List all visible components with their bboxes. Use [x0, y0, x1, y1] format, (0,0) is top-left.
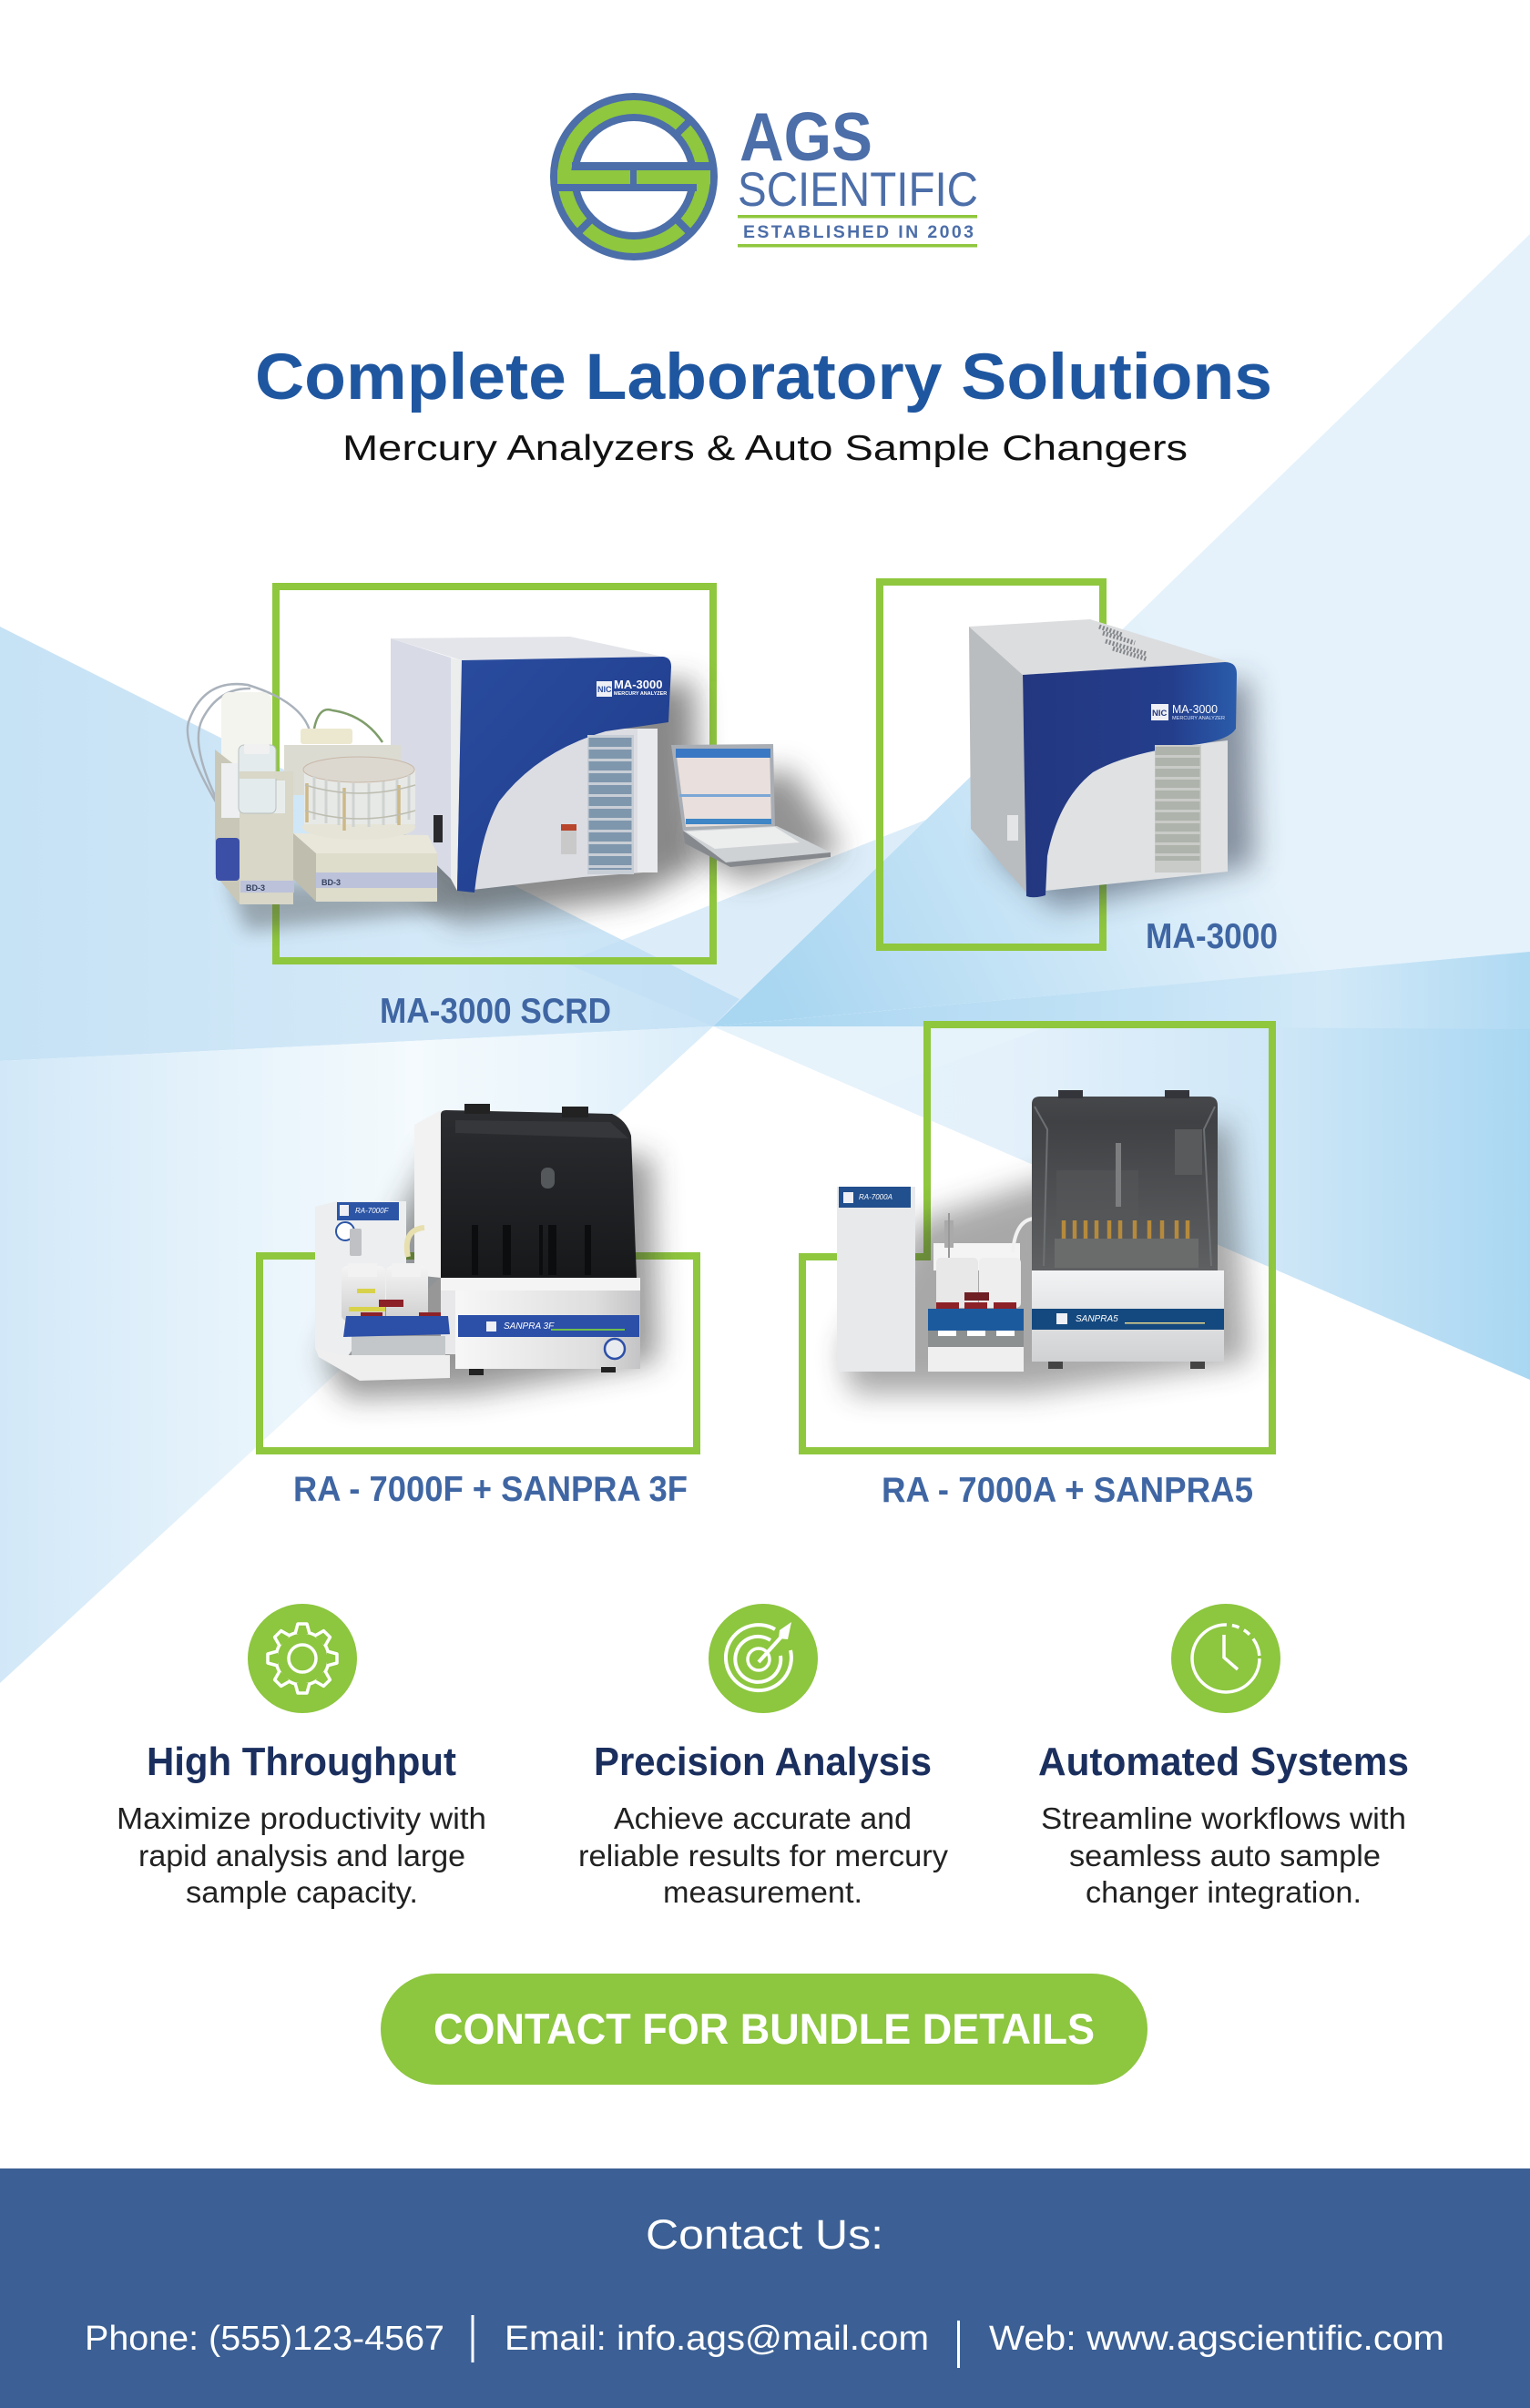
tubing	[188, 684, 310, 838]
description: measurement.	[663, 1875, 862, 1909]
panel: MA-3000 SCRD	[188, 587, 842, 1031]
product: MA-3000 analyzer: MERCURY ANALYZER	[1172, 716, 1225, 721]
product: RA-7000A with SANPRA5	[837, 1090, 1250, 1393]
sampler tower	[215, 750, 243, 904]
analyzer body	[391, 637, 671, 660]
product: MA-3000 SCRD system: MA-3000	[614, 678, 662, 691]
description: rapid analysis and large	[138, 1839, 465, 1872]
product: RA-7000A with SANPRA5: SANPRA5	[1076, 1314, 1118, 1324]
feature: High Throughput	[117, 1604, 486, 1909]
description: reliable results for mercury	[578, 1839, 949, 1872]
white back column	[414, 1110, 441, 1278]
product: RA-7000F with SANPRA 3F: SANPRA 3F	[504, 1321, 555, 1332]
product: MA-3000 SCRD system	[188, 637, 842, 931]
green frame	[880, 582, 1103, 947]
tall analyzer unit	[837, 1187, 915, 1372]
footer heading: Contact Us:	[646, 2211, 883, 2258]
product: MA-3000 analyzer: NIC	[1152, 709, 1168, 719]
dark lid	[441, 1110, 637, 1278]
sample tray	[352, 1336, 445, 1356]
feature: Precision Analysis	[578, 1604, 949, 1909]
panel: RA-7000A + SANPRA5	[802, 1025, 1272, 1510]
description	[117, 1801, 486, 1909]
laptop	[671, 744, 775, 832]
separator	[957, 2321, 960, 2368]
product: RA-7000A with SANPRA5: RA-7000A	[859, 1193, 892, 1201]
smoked lid	[1032, 1097, 1218, 1270]
left analyzer unit	[315, 1201, 406, 1366]
heading: Precision Analysis	[594, 1740, 932, 1784]
heading: Automated Systems	[1038, 1740, 1409, 1784]
logo wordmark: SCIENTIFIC: SCIENTIFIC	[738, 163, 978, 217]
panel: RA-7000F + SANPRA 3F	[260, 1104, 697, 1509]
logo rules and tagline: ESTABLISHED IN 2003	[743, 222, 974, 242]
icon: clock	[1171, 1604, 1280, 1713]
sample tray	[928, 1331, 1024, 1348]
product label: RA - 7000A + SANPRA5	[882, 1471, 1253, 1510]
icon: gear	[248, 1604, 357, 1713]
green frame	[276, 587, 713, 961]
sampler base	[1032, 1270, 1224, 1362]
product: MA-3000 SCRD system: MERCURY ANALYZER	[614, 691, 667, 697]
separator	[472, 2315, 474, 2362]
product: MA-3000 SCRD system: NIC	[597, 685, 612, 694]
description: sample capacity.	[186, 1875, 418, 1909]
description: Achieve accurate and	[614, 1801, 912, 1835]
email: Email: info.ags@mail.com	[505, 2320, 929, 2358]
description: changer integration.	[1086, 1875, 1362, 1909]
call-to-action button	[381, 1974, 1148, 2085]
description: seamless auto sample	[1069, 1839, 1381, 1872]
heading: High Throughput	[147, 1740, 456, 1784]
product: MA-3000 SCRD system: BD-3	[246, 883, 265, 893]
description	[578, 1801, 949, 1909]
description: Streamline workflows with	[1041, 1801, 1406, 1835]
sampler lower box	[441, 1278, 640, 1291]
reagent bottle	[221, 692, 271, 770]
phone: Phone: (555)123-4567	[85, 2320, 444, 2358]
feature: Automated Systems	[1038, 1604, 1409, 1909]
product: MA-3000 analyzer	[969, 619, 1255, 909]
logo rules and tagline	[738, 215, 977, 248]
description: Maximize productivity with	[117, 1801, 486, 1835]
sampler base	[293, 833, 437, 853]
green frame	[260, 1256, 697, 1451]
call-to-action button: CONTACT FOR BUNDLE DETAILS	[434, 2005, 1095, 2053]
website: Web: www.agscientific.com	[989, 2320, 1444, 2358]
product label: MA-3000	[1146, 917, 1278, 956]
probe and bottles	[350, 1229, 362, 1256]
probe and bottles	[933, 1243, 1020, 1270]
description	[1041, 1801, 1406, 1909]
panel: MA-3000	[880, 582, 1278, 956]
background: geometric blue shards	[0, 234, 1530, 1683]
product: MA-3000 analyzer: MA-3000	[1172, 702, 1218, 716]
logo: AGS Scientific	[550, 93, 978, 260]
logo wordmark: AGS: AGS	[740, 98, 872, 175]
subtitle: Mercury Analyzers & Auto Sample Changers	[342, 429, 1188, 468]
product: MA-3000 SCRD system: BD-3	[321, 878, 341, 887]
footer: contact band	[0, 2168, 1530, 2408]
product label: RA - 7000F + SANPRA 3F	[293, 1470, 688, 1509]
carousel	[302, 814, 415, 840]
product: RA-7000F with SANPRA 3F: RA-7000F	[355, 1207, 390, 1215]
logo mark	[550, 93, 718, 260]
product: RA-7000F with SANPRA 3F	[315, 1104, 658, 1398]
product label: MA-3000 SCRD	[380, 992, 611, 1031]
title: Complete Laboratory Solutions	[255, 342, 1272, 413]
icon: target with arrow	[709, 1604, 818, 1713]
sampler back panel and arm	[284, 745, 401, 795]
green frame	[802, 1025, 1272, 1451]
